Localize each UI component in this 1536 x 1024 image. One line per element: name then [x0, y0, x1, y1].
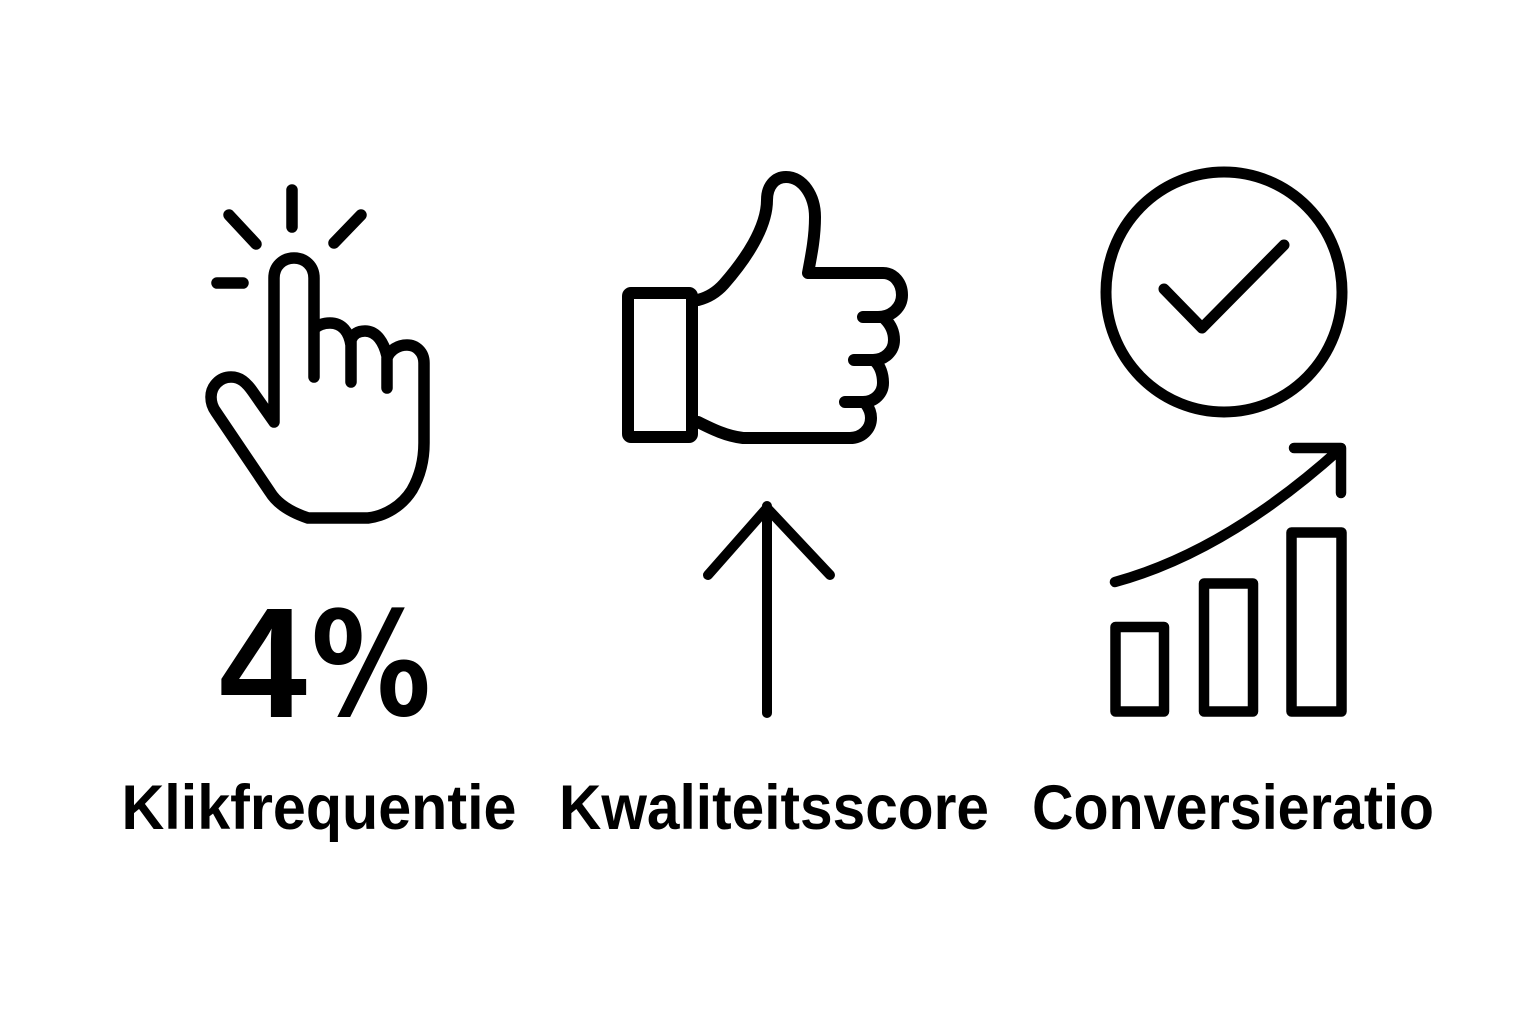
- arrow: up: [708, 506, 830, 713]
- icon: check circle: [1106, 172, 1342, 412]
- big number: 4%: 4: [219, 576, 307, 751]
- chart: rising bars with arrow: [1115, 448, 1342, 712]
- big number: 4%: [219, 576, 431, 751]
- label: Kwaliteitsscore: Kwaliteitsscore: [559, 773, 989, 843]
- panel: kwaliteitsscore: [559, 177, 989, 843]
- label: Conversieratio: Conversieratio: [1032, 773, 1434, 843]
- label: Klikfrequentie: Klikfrequentie: [122, 773, 516, 843]
- icon: thumbs up: [628, 177, 902, 438]
- panel: klikfrequentie: [122, 190, 516, 843]
- big number: 4%: %: [311, 581, 431, 750]
- icon: clicking hand: [211, 190, 424, 518]
- panel: conversieratio: [1032, 172, 1434, 843]
